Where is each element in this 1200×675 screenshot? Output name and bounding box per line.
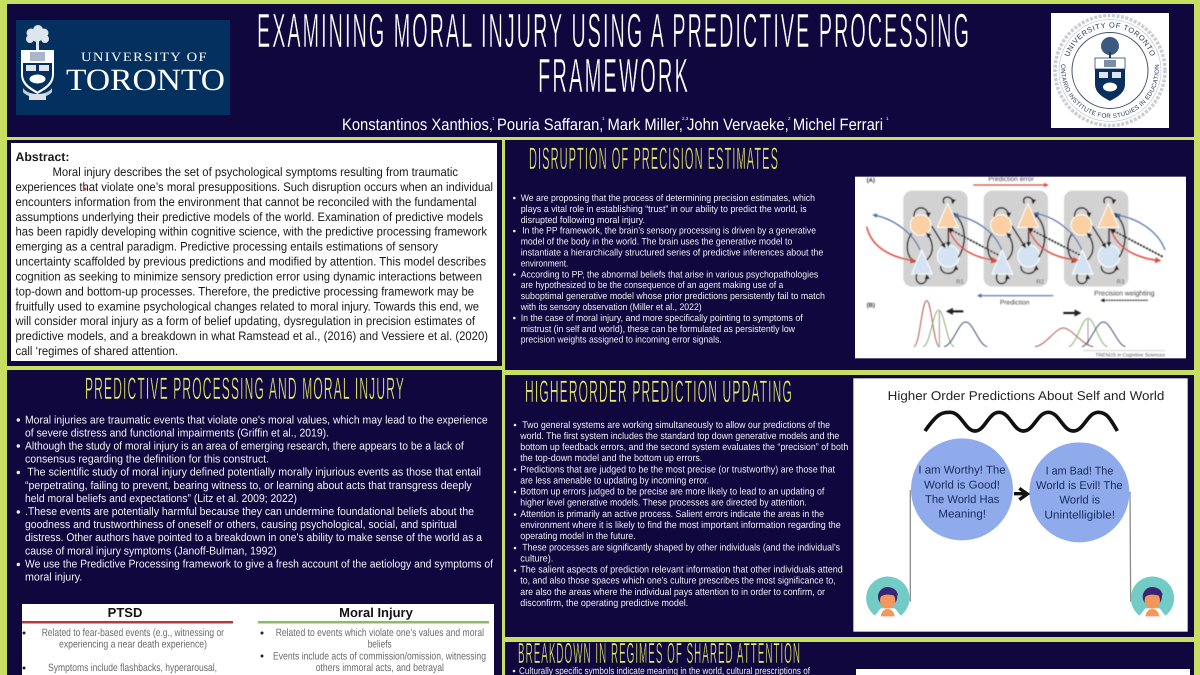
bullet list: In the case of moral injury, and more specifically pointing to symptoms of — [521, 313, 803, 324]
bullet list: precision weights assigned to incoming error signals. — [521, 335, 722, 346]
bullet list: environment. — [521, 258, 568, 269]
belief circle: before: I am Worthy! The — [918, 464, 1006, 476]
regions R1 R2 R3: R2 — [1036, 278, 1044, 285]
belief circle: after — [1029, 442, 1129, 542]
logo: University of Toronto: UNIVERSITY OF — [81, 50, 208, 64]
title — [257, 5, 971, 103]
bullet list: to, and also those spaces which one's culture prescribes the most significance to, — [520, 576, 836, 587]
figure title: Higher Order Predictions About Self and World — [888, 389, 1164, 403]
authors: 1 — [602, 116, 605, 121]
belief circle: before: World is Good! — [924, 478, 1000, 491]
bullet list — [514, 420, 848, 609]
bullet list: are hypothesized to be the consequence of an agent making use of a — [521, 280, 784, 291]
abstract text box: encounters information from the environment that cannot be reconciled with the fundamental — [16, 195, 476, 209]
belief circle: after: Unintelligible! — [1044, 508, 1115, 521]
abstract text box: fruitfully used to examine psychological changes related to moral injury. Towards this end, we — [16, 299, 479, 313]
abstract text box — [11, 143, 497, 361]
bullet list: with its sensory observation (Miller et al., 2022) — [520, 302, 702, 313]
bullet list: The salient aspects of prediction relevant information that other individuals attend — [520, 564, 843, 576]
avatar: left — [866, 577, 909, 616]
regions R1 R2 R3: R1 — [956, 278, 964, 285]
column: PTSD: Related to fear-based events (e.g., witnessing or — [42, 627, 224, 639]
authors: 2 — [788, 116, 791, 121]
regions R1 R2 R3 — [903, 191, 1128, 287]
bullet list: are also the areas where the individual pays attention to in order to confirm, or — [520, 587, 826, 598]
prediction arrows — [873, 213, 1165, 250]
logo: University of Toronto: TORONTO — [66, 62, 225, 97]
regions R1 R2 R3: R3 — [1117, 278, 1124, 285]
figure legend: Precision weighting — [1094, 290, 1154, 297]
abstract text box: will consider moral injury as a form of belief updating, dysregulation in precision estimates of — [15, 314, 476, 328]
arrow — [1014, 488, 1027, 500]
figure legend — [867, 175, 1154, 308]
bullet list: disrupted following moral injury. — [521, 215, 645, 226]
avatar: right — [1131, 577, 1174, 616]
logo: OISE seal — [1051, 13, 1169, 128]
bullet list: In the PP framework, the brain’s sensory processing is driven by a generative — [522, 226, 816, 237]
bullet list: Two general systems are working simultaneously to allow our predictions of the — [522, 420, 830, 431]
logo: OISE seal: UNIVERSITY OF TORONTO — [1064, 22, 1155, 56]
figure: higher order predictions — [853, 378, 1188, 632]
column: moral injury: Moral Injury — [339, 605, 414, 620]
bullet list: We are proposing that the process of determining precision estimates, which — [521, 193, 815, 204]
abstract text box: assumptions underlying their predictive models of the world. Examination of predictive models — [16, 210, 483, 224]
belief circle: before: Meaning! — [938, 508, 986, 520]
bullet list: Attention is primarily an active process. Salient errors indicate the areas in the — [520, 509, 824, 520]
panel: higher order prediction updating — [505, 374, 1194, 637]
precision weighting arrows — [948, 228, 1163, 257]
bullet list: the top-down model and the bottom up errors. — [520, 453, 702, 464]
figure: predictive processing diagram — [855, 175, 1186, 358]
logo: OISE seal: ONTARIO INSTITUTE FOR STUDIES IN EDUCATION — [1061, 64, 1159, 118]
bullet list: of severe distress and functional impairments (Griffin et al., 2019). — [25, 427, 329, 439]
bullet list — [17, 414, 494, 584]
belief circle: before — [911, 438, 1013, 540]
bullet list: instantiate a hierarchically structured series of predictive inferences about the — [521, 248, 823, 258]
panel: predictive processing and moral injury: PREDICTIVE PROCESSING AND MORAL INJURY — [85, 371, 405, 406]
abstract text box: experiences that violate one’s moral presuppositions. Such disruption occurs when an individual — [16, 180, 493, 194]
abstract text box: call ‘regimes of shared attention. — [16, 344, 178, 358]
prediction error arrows — [867, 227, 1160, 261]
panel: header — [7, 4, 1194, 137]
abstract text box: Moral injury describes the set of psychological symptoms resulting from traumatic — [52, 165, 458, 179]
bullet list: environment where it is likely to find the most important information regarding the — [520, 520, 841, 531]
figure legend: Prediction — [1000, 299, 1029, 306]
figure credit — [1083, 350, 1165, 358]
bullet list: cause of moral injury symptoms (Janoff-Bulman, 1992) — [25, 545, 277, 557]
wave — [925, 412, 1117, 431]
bullet list: model of the body in the world. The brain uses the generative model to — [521, 237, 792, 248]
column: PTSD: Symptoms include flashbacks, hyperarousal, — [48, 662, 217, 674]
column: PTSD: PTSD — [108, 605, 142, 620]
belief circle: after: World is — [1059, 494, 1100, 506]
bullet list: culture). — [520, 553, 553, 564]
distribution curves — [914, 301, 1125, 347]
column: moral injury: Related to events which violate one's values and moral — [276, 627, 484, 639]
abstract text box: uncertainty scaffolded by previous predictions and modified by attention. This model describes — [16, 254, 486, 268]
bullet list: consensus regarding the definition for this construct. — [25, 454, 269, 466]
bullet list — [513, 193, 825, 346]
column: moral injury: Events include acts of commission/omission, witnessing — [273, 650, 486, 662]
figure credit: TRENDS in Cognitive Sciences — [1095, 352, 1165, 358]
authors: Konstantinos Xanthios, Pouria Saffaran, Mark Miller, John Vervaeke, Michel Ferrari — [342, 116, 883, 134]
figure legend: Prediction error — [988, 175, 1034, 183]
bullet list: are less amenable to updating by incoming error. — [520, 476, 709, 486]
bullet list: We use the Predictive Processing framework to give a fresh account of the aetiology and symptoms of — [25, 558, 494, 570]
belief circle: after: World is Evil! The — [1036, 479, 1123, 492]
figure legend: (A) — [867, 177, 875, 183]
authors: 1 — [886, 116, 889, 121]
bullet list: disconfirm, the operating predictive model. — [520, 598, 688, 609]
abstract text box: cognition as seeking to minimize sensory prediction error using dynamic interactions between — [16, 269, 482, 283]
bullet list: plays a vital role in establishing “trust” in our ability to predict the world, is — [521, 204, 807, 215]
panel: disruption of precision estimates — [505, 140, 1194, 370]
bullet list: goodness and trustworthiness of oneself or others, causing psychological, social, and spiritual — [25, 519, 457, 531]
abstract text box: Abstract: — [16, 150, 69, 164]
bullet list: According to PP, the abnormal beliefs that arise in various psychopathologies — [521, 269, 819, 280]
abstract text box: predictive models, and a breakdown in what Ramstead et al., (2016) and Vessiere et al. (2020) — [16, 329, 488, 343]
panel: abstract — [7, 140, 502, 366]
column: PTSD — [22, 605, 233, 674]
abstract text box: has been rapidly developing within cognitive science, with the predictive processing framework — [16, 225, 488, 239]
crest tree — [26, 25, 49, 50]
bullet list: The scientific study of moral injury defined potentially morally injurious events as those that entail — [27, 467, 481, 479]
bullet list: mistrust (in self and world), these can be formulated as persistently low — [521, 324, 795, 335]
bullet list: distress. Other authors have pointed to a breakdown in one's ability to make sense of the world as a — [25, 532, 483, 544]
authors: 1 — [492, 116, 495, 121]
bullet list: bottom up feedback errors, and the second system evaluates the “precision” of both — [520, 442, 848, 453]
bullet list: .These events are potentially harmful because they can undermine foundational beliefs about the — [25, 506, 474, 518]
table: PTSD vs moral injury — [22, 604, 494, 675]
bullet list: These processes are significantly shaped by other individuals (and the individual's — [522, 542, 840, 553]
belief circle: before: The World Has — [925, 493, 999, 506]
title: FRAMEWORK — [538, 50, 690, 103]
column: moral injury: beliefs — [368, 639, 392, 651]
column: moral injury — [258, 605, 489, 674]
abstract text box: emerging as a central paradigm. Predictive processing entails estimations of sensory — [16, 240, 439, 254]
connector lines — [910, 490, 1131, 602]
bullet list: operating model in the future. — [520, 531, 636, 542]
column: PTSD: experiencing a near death experience) — [59, 639, 207, 651]
bullet list: world. The first system includes the standard top down generative models and the — [519, 431, 839, 442]
figure legend: (B) — [867, 302, 875, 308]
figure top edge — [856, 669, 1190, 675]
bullet list: Bottom up errors judged to be precise are more likely to lead to an updating of — [520, 487, 825, 498]
bullet list: held moral beliefs and expectations” (Litz et al. 2009; 2022) — [25, 493, 297, 505]
bullet list: Moral injuries are traumatic events that violate one's moral values, which may lead to the experience — [25, 414, 488, 426]
bullet list: higher level generative models. These processes are directed by attention. — [520, 498, 807, 509]
bullet list: moral injury. — [25, 572, 82, 584]
panel: higher order prediction updating: HIGHERORDER PREDICTION UPDATING — [525, 374, 793, 409]
column: moral injury: others immoral acts, and betrayal — [316, 662, 444, 674]
panel: predictive processing and moral injury — [7, 370, 502, 675]
bullet list: suboptimal generative model whose prior predictions persistently fail to match — [521, 291, 825, 302]
abstract text box: top-down and bottom-up processes. Therefore, the predictive processing framework may be — [16, 284, 474, 298]
authors: 2,3 — [682, 116, 689, 121]
belief circle: after: I am Bad! The — [1046, 464, 1113, 477]
bullet list: Although the study of moral injury is an area of emerging research, there appears to be a lack of — [25, 440, 465, 452]
bullet list: Predictions that are judged to be the most precise (or trustworthy) are those that — [520, 464, 835, 475]
logo: University of Toronto — [16, 20, 230, 115]
bullet list: “perpetrating, failing to prevent, bearing witness to, or learning about acts that transgress deeply — [25, 480, 472, 492]
